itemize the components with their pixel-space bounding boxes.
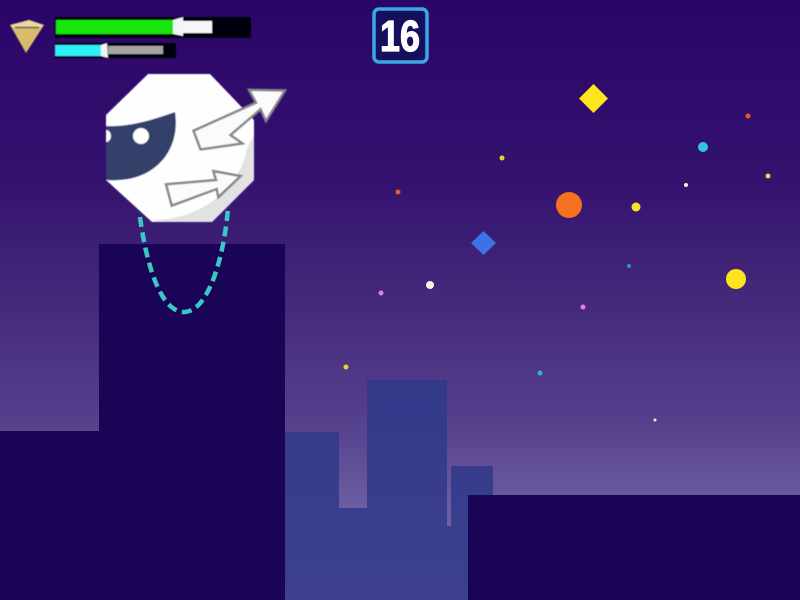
score number: 16 bbox=[380, 12, 420, 61]
energy bar bbox=[55, 43, 176, 58]
body shading bbox=[152, 135, 254, 222]
lower arrow bbox=[166, 171, 241, 206]
gem icon bbox=[10, 20, 44, 53]
health remainder bbox=[183, 21, 212, 33]
energy fill bbox=[55, 45, 101, 56]
energy handle bbox=[101, 43, 108, 58]
eye glint at edge bbox=[106, 130, 111, 142]
energy remainder bbox=[108, 46, 163, 54]
yellow orb bbox=[726, 269, 746, 289]
health handle bbox=[173, 17, 183, 36]
score box bbox=[374, 9, 427, 62]
yellow diamond bbox=[579, 84, 608, 113]
blue diamond bbox=[471, 231, 496, 255]
robot character bbox=[106, 74, 285, 222]
background skyline bbox=[285, 380, 493, 600]
foreground buildings bbox=[0, 244, 800, 600]
upper arrow bbox=[194, 90, 285, 150]
octagon body bbox=[106, 74, 254, 222]
eye highlight bbox=[133, 128, 149, 144]
health bar bbox=[55, 17, 251, 38]
dashed rope bbox=[140, 208, 228, 312]
collectible dots and diamonds bbox=[344, 84, 770, 422]
eye bbox=[106, 112, 176, 180]
health fill bbox=[56, 20, 174, 34]
orange orb bbox=[556, 192, 582, 218]
